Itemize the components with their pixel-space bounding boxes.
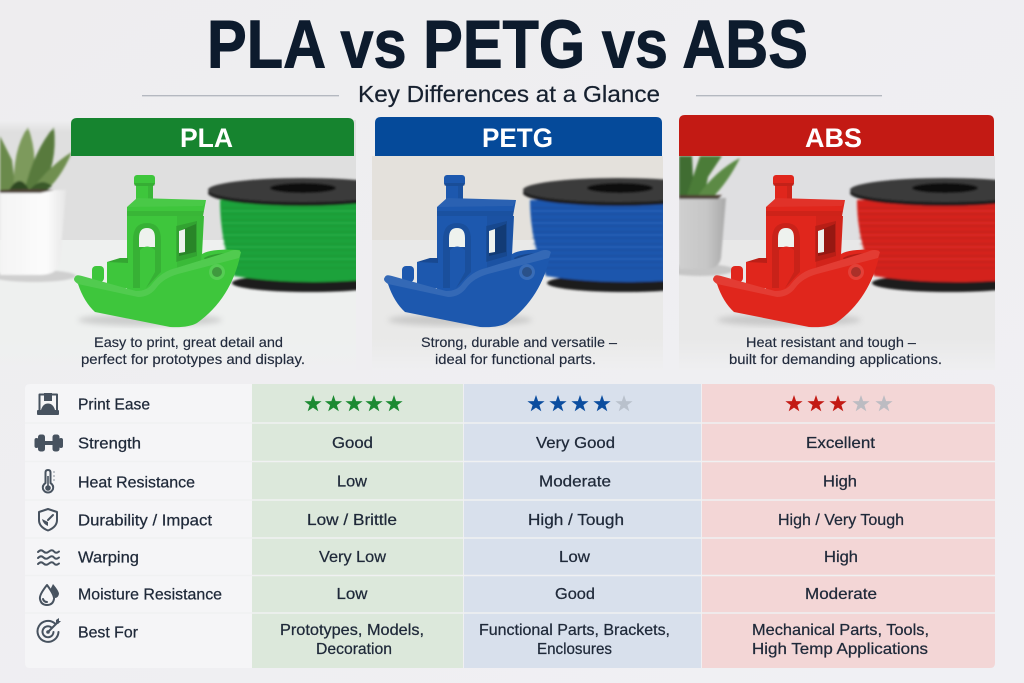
row: Heat Resistance: Low [337, 474, 367, 490]
row: Moisture Resistance: Low [336, 586, 368, 603]
caption: PLA: perfect for prototypes and display. [81, 351, 305, 367]
panel: ABS [679, 115, 995, 368]
row: Durability / Impact [39, 509, 904, 530]
header: PETG [375, 117, 662, 156]
row: Heat Resistance: High [823, 474, 857, 490]
row: Strength: Excellent [806, 435, 876, 452]
row: Moisture Resistance: Moisture Resistance [78, 586, 222, 604]
icon: shield [39, 509, 57, 530]
row: Best For: Functional Parts, Brackets, [479, 622, 670, 639]
title: PLA vs PETG vs ABS [207, 7, 808, 83]
caption: PETG: ideal for functional parts. [435, 351, 596, 367]
row: Durability / Impact: Low / Brittle [307, 512, 397, 529]
PLA stars: 5 of 5 [304, 395, 403, 411]
panel: PLA [0, 118, 356, 368]
panel: PETG [372, 117, 663, 368]
row: Durability / Impact: High / Tough [528, 512, 624, 529]
icon: 3D printer [37, 393, 59, 415]
ABS stars: 3 of 5 [785, 395, 893, 411]
header: PLA: PLA [180, 123, 233, 153]
caption: PLA: Easy to print, great detail and [94, 334, 283, 350]
row: Strength: Good [332, 435, 373, 452]
row: Warping [38, 549, 858, 566]
row: Print Ease: Print Ease [78, 396, 150, 414]
PETG stars: 4 of 5 [527, 395, 633, 411]
row: Heat Resistance: Heat Resistance [78, 474, 195, 492]
PLA column [252, 384, 463, 668]
row: Moisture Resistance: Moderate [805, 586, 877, 603]
subtitle: Key Differences at a Glance [358, 81, 660, 107]
row: Print Ease [37, 393, 893, 415]
row: Warping: Low [559, 549, 590, 566]
header: ABS: ABS [805, 123, 862, 153]
caption: ABS: Heat resistant and tough – [746, 334, 916, 350]
header: PLA [71, 118, 354, 156]
photo: PLA benchy and spool [0, 120, 356, 328]
caption: PETG: Strong, durable and versatile – [421, 334, 617, 350]
row: Best For: High Temp Applications [752, 641, 928, 658]
row: Durability / Impact: Durability / Impact [78, 512, 213, 530]
caption: PLA [81, 334, 305, 367]
icon: target [38, 618, 61, 642]
row: Heat Resistance: Moderate [539, 474, 611, 490]
row: Heat Resistance [43, 470, 857, 492]
icon: water drops [40, 584, 59, 605]
row: Moisture Resistance: Good [555, 586, 595, 603]
caption: ABS: built for demanding applications. [729, 351, 942, 367]
PETG column [464, 384, 701, 668]
header: ABS [679, 115, 994, 156]
row: Strength: Very Good [536, 435, 615, 452]
header: PETG: PETG [482, 123, 553, 153]
ABS column [702, 384, 995, 668]
photo: ABS benchy and spool [679, 156, 995, 346]
icon: waves [38, 550, 59, 565]
row: Warping: High [824, 549, 858, 566]
icon: dumbbell [34, 434, 63, 452]
row: Best For [38, 618, 929, 658]
caption: ABS [729, 334, 942, 367]
row labels column [25, 384, 252, 668]
row: Strength: Strength [78, 436, 141, 452]
comparison table [25, 384, 995, 668]
row: Durability / Impact: High / Very Tough [778, 512, 904, 529]
row: Best For: Decoration [316, 641, 392, 658]
row: Warping: Warping [78, 550, 139, 566]
photo: PETG benchy and spool [372, 156, 663, 344]
icon: thermometer [43, 470, 55, 492]
row: Strength [34, 434, 876, 452]
row: Moisture Resistance [40, 584, 877, 605]
row: Warping: Very Low [319, 549, 386, 566]
row: Best For: Best For [78, 624, 139, 642]
row: Best For: Prototypes, Models, [280, 622, 424, 639]
caption: PETG [421, 334, 617, 367]
row: Best For: Enclosures [537, 641, 612, 658]
row: Best For: Mechanical Parts, Tools, [752, 622, 929, 639]
